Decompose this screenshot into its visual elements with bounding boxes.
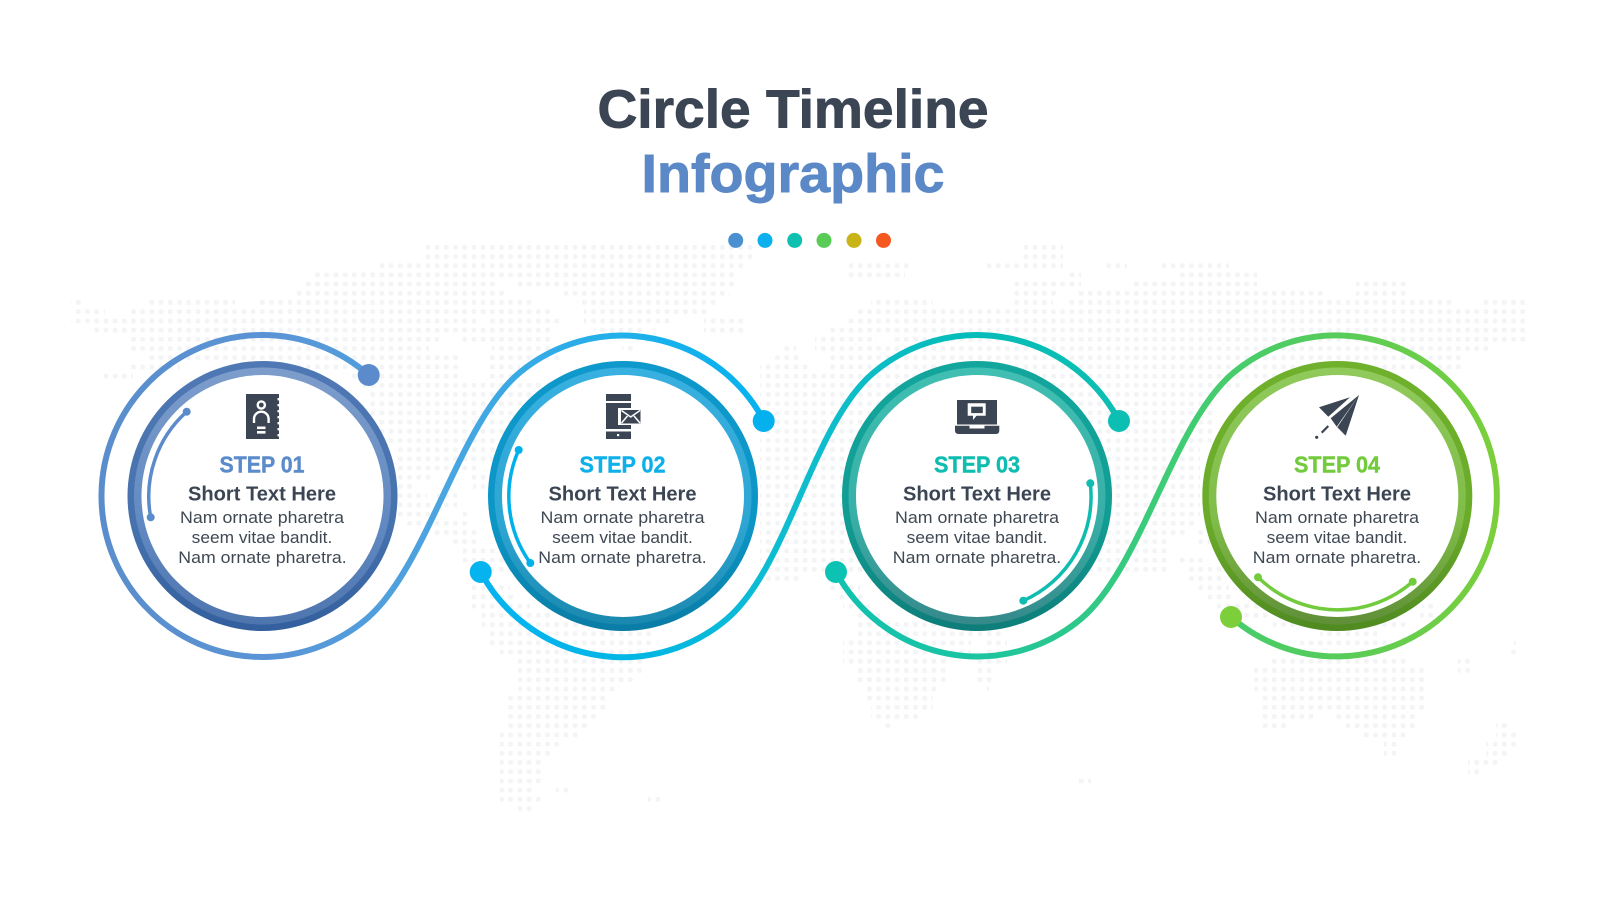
body text [538,508,707,567]
connector line: step 3 to step 4 [836,335,1497,656]
body text [1253,508,1421,567]
icon: laptop with speech bubble [955,400,999,434]
heading: Short Text Here [1263,484,1411,506]
title [598,80,988,204]
body text: seem vitae bandit. [192,528,332,547]
terminal dot step 3 left [825,561,847,583]
terminal dot step 3 right [1108,410,1130,432]
ring [842,361,1112,631]
inner accent arc [509,446,534,567]
ring [488,361,758,631]
icon: paper plane [1315,395,1359,439]
inner accent arc [1019,479,1094,605]
title line 2: Infographic [642,144,944,204]
connector line: step 1 to step 2 [101,335,764,657]
step label: STEP 03 [934,452,1020,478]
body text [893,508,1061,567]
step label: STEP 02 [580,452,666,478]
icon: phone with envelope [606,394,642,439]
title line 1: Circle Timeline [598,80,988,140]
connector line: step 2 to step 3 [481,335,1119,657]
inner accent arc [1254,573,1417,610]
body text: Nam ornate pharetra [1255,508,1420,527]
body text: Nam ornate pharetra [540,508,705,527]
heading: Short Text Here [548,484,696,506]
panel: step 2 [488,361,758,631]
body text: Nam ornate pharetra. [178,548,347,567]
six decorative colour dots [728,233,891,248]
body text: seem vitae bandit. [907,528,1047,547]
panel: step 1 [128,361,398,631]
panel: step 3 [842,361,1112,631]
heading: Short Text Here [188,484,336,506]
inner accent arc [147,408,191,521]
heading: Short Text Here [903,484,1051,506]
body text: seem vitae bandit. [1267,528,1407,547]
body text: Nam ornate pharetra. [538,548,707,567]
body text: Nam ornate pharetra. [893,548,1061,567]
body text [178,508,347,567]
body text: Nam ornate pharetra [895,508,1060,527]
step label: STEP 01 [220,452,305,478]
terminal dot step 4 [1220,606,1242,628]
ring [128,361,398,631]
body text: Nam ornate pharetra [180,508,345,527]
terminal dot step 2 right [753,410,775,432]
ring [1202,361,1472,631]
terminal dot step 2 left [470,561,492,583]
step label: STEP 04 [1294,452,1380,478]
terminal dot step 1 [358,364,380,386]
body text: Nam ornate pharetra. [1253,548,1421,567]
panel: step 4 [1202,361,1472,631]
icon: address book [246,394,280,439]
dotted world map background [71,247,1527,808]
body text: seem vitae bandit. [552,528,693,547]
